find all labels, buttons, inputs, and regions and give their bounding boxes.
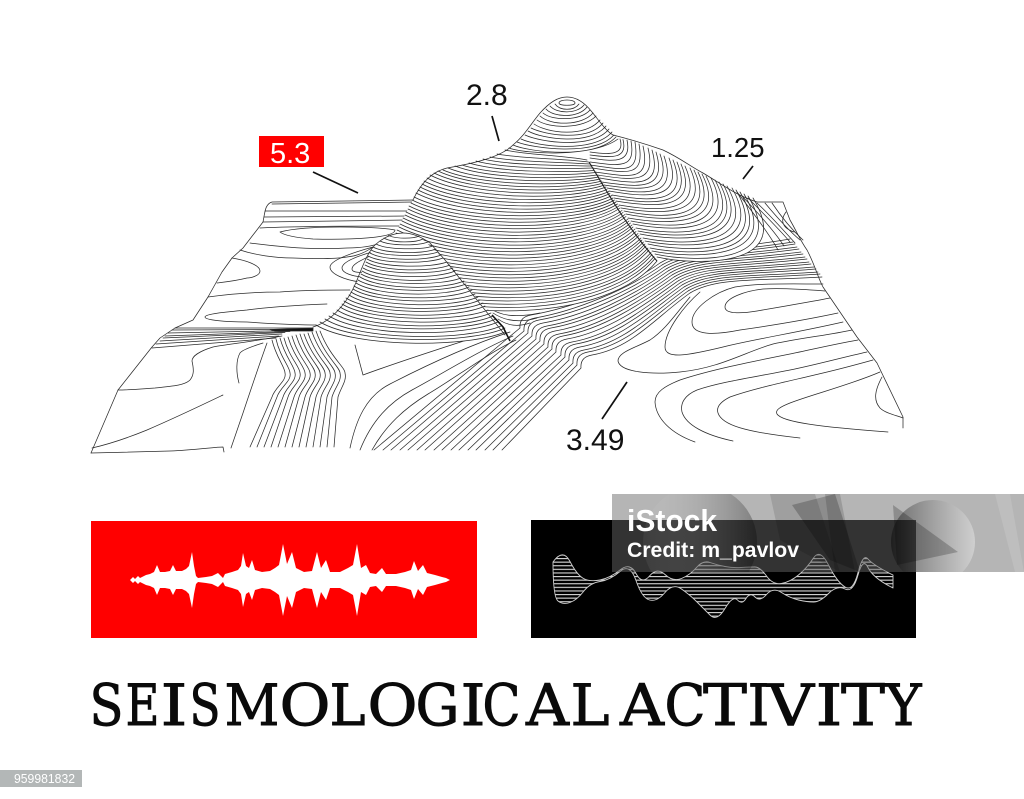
- label: 3.49: 3.49: [566, 424, 624, 457]
- terrain: upper silhouette: [413, 97, 903, 428]
- terrain: near peak: [313, 233, 510, 343]
- title: I: [816, 672, 842, 739]
- watermark: geometric shapes: [643, 494, 1024, 572]
- title: G: [416, 672, 460, 739]
- label: 1.25: 1.25: [711, 132, 765, 163]
- summit rings: [509, 100, 618, 153]
- terrain: main dome with summit: [374, 97, 657, 311]
- watermark: iStock wordmark: iStock: [627, 503, 718, 538]
- title: C: [664, 672, 706, 739]
- title: V: [766, 672, 816, 739]
- panel: black waveform: [531, 520, 916, 638]
- waveform: white seismogram: [130, 544, 450, 616]
- title: O: [280, 672, 330, 739]
- title: L: [570, 672, 610, 739]
- title: S: [190, 672, 220, 739]
- title: Y: [885, 672, 922, 739]
- terrain: valley contours in the foreground: [350, 239, 822, 450]
- dome crease: [589, 162, 657, 261]
- contour map: terrain: [91, 97, 903, 453]
- title: A: [525, 672, 571, 739]
- image id tag: 959981832: [14, 771, 75, 786]
- terrain: rear right ridge: [590, 139, 803, 261]
- title: I: [748, 672, 770, 739]
- label: 2.8: 2.8: [466, 79, 508, 112]
- panel: red waveform: [91, 521, 477, 638]
- title: E: [126, 672, 160, 739]
- label: 2.8: [466, 79, 508, 141]
- label: 3.49: [566, 382, 627, 457]
- label: 1.25: [711, 132, 765, 179]
- title: M: [224, 672, 280, 739]
- label: 5.3 on red tag: 5.3: [270, 138, 310, 170]
- terrain: rear plateau and left flank: [91, 200, 413, 453]
- watermark: iStock credit band: [612, 494, 1024, 572]
- title: I: [160, 672, 188, 739]
- leader line: 5.3: [313, 172, 358, 193]
- title: T: [841, 672, 885, 739]
- title: L: [330, 672, 366, 739]
- label: 5.3 on red tag: [259, 136, 358, 193]
- terrain: left foot of the near peak: [250, 331, 345, 447]
- dome contours: [374, 150, 657, 311]
- watermark: credit line: Credit: m_pavlov: [627, 539, 799, 562]
- title: A: [619, 672, 666, 739]
- title: O: [368, 672, 418, 739]
- title: C: [482, 672, 520, 739]
- terrain: right slope contours: [618, 284, 903, 442]
- title: T: [703, 672, 747, 739]
- waveform: white line ribbon: [553, 554, 893, 617]
- title: I: [460, 672, 486, 739]
- title: S: [90, 672, 124, 739]
